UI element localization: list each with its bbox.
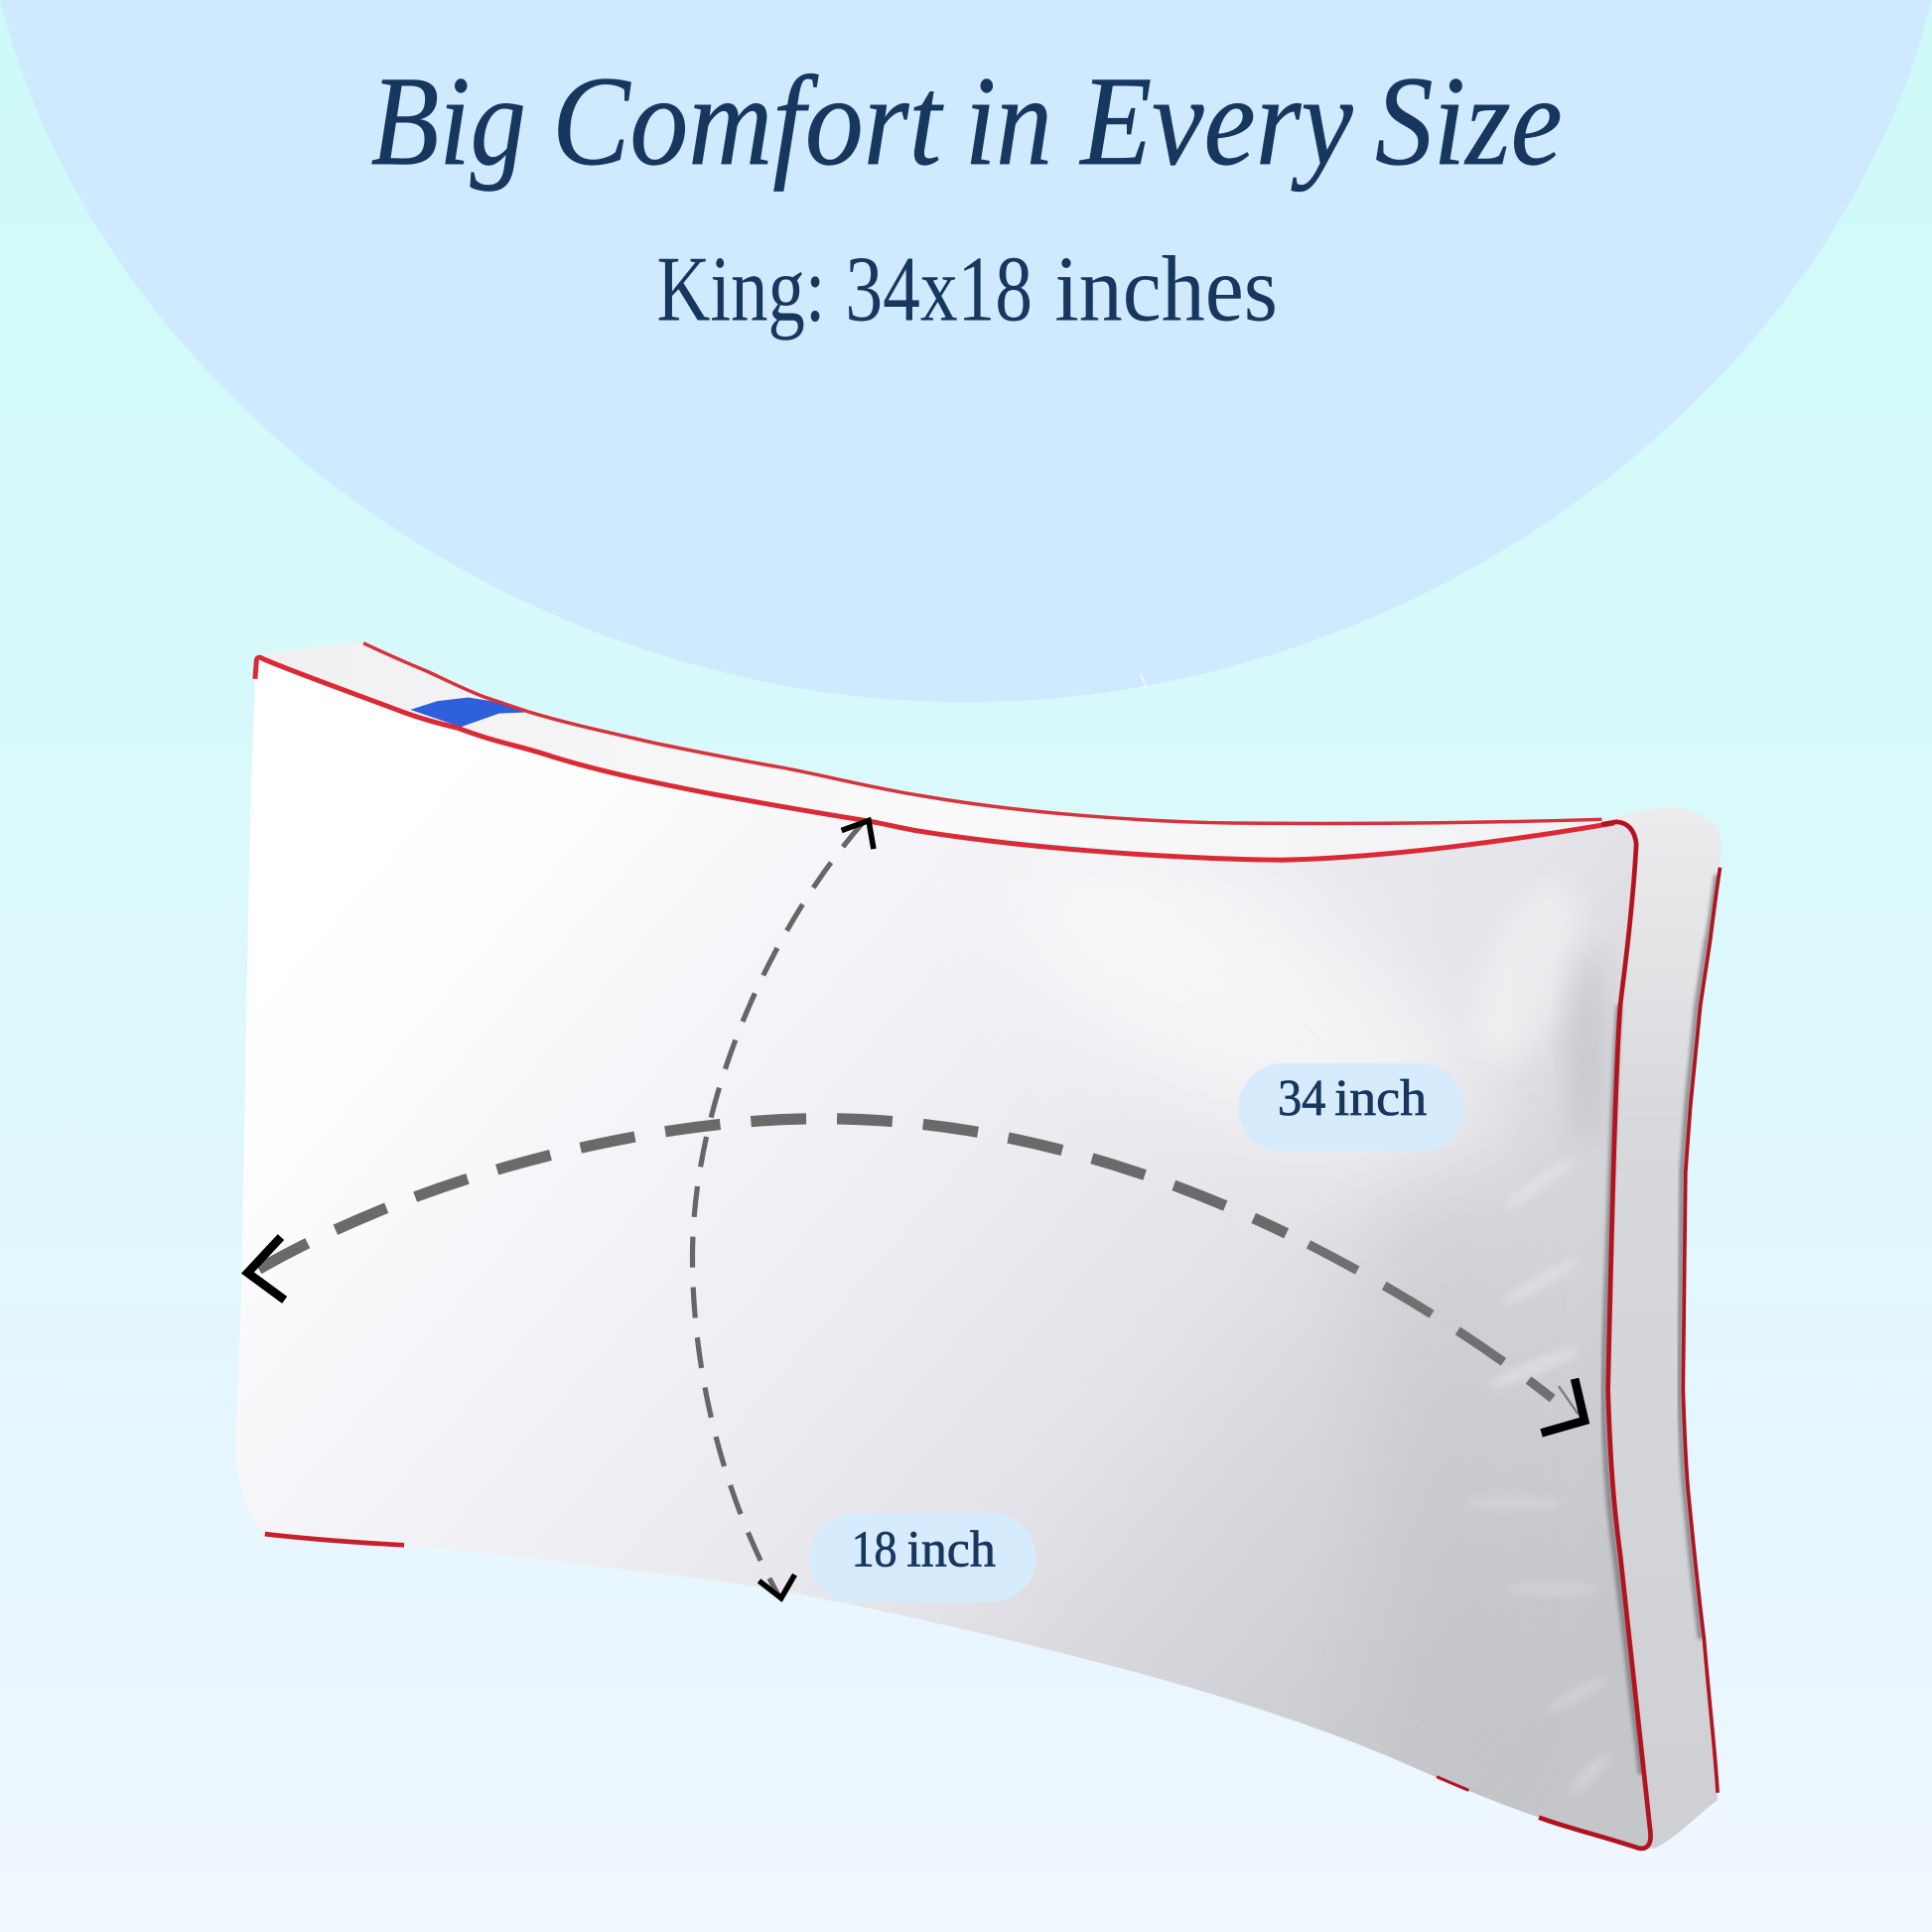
label: 18 inch: [809, 1513, 1036, 1601]
label: 18 inch: 18: [852, 1521, 897, 1578]
bottom left red piping: [265, 1534, 404, 1545]
back red piping: [363, 643, 1601, 824]
subtitle: king size: 34x18: [845, 238, 1033, 342]
width arrowhead left: [247, 1237, 285, 1300]
label: 18 inch: inch: [906, 1521, 996, 1578]
subtitle: king size: King:: [656, 238, 826, 342]
label: 34 inch: 34: [1278, 1070, 1325, 1127]
small notch on semicircle: [1141, 674, 1146, 688]
pillow front face: [235, 656, 1651, 1849]
pillow top band: [256, 643, 1636, 865]
back right shadow line: [1680, 875, 1717, 1639]
width dashed curve left: [259, 1119, 1287, 1269]
label: 34 inch: inch: [1334, 1070, 1427, 1127]
height arrowhead top: [842, 821, 874, 849]
bottom right red piping: [1437, 1777, 1468, 1790]
pillow side gusset: [1596, 807, 1722, 1849]
height arrowhead bottom: [759, 1575, 794, 1598]
width arrowhead right: [1542, 1379, 1585, 1433]
fabric highlights and wrinkles: [967, 778, 1614, 1799]
width arrow tip: [1559, 1386, 1579, 1415]
title: Big: [371, 50, 526, 192]
label: 34 inch: [1238, 1063, 1465, 1152]
corner and side inner shadow: [1603, 1006, 1641, 1774]
front red piping: [255, 657, 1614, 860]
back right red piping: [1683, 868, 1721, 1793]
pillow: [235, 643, 1722, 1849]
subtitle: king size: inches: [1054, 238, 1278, 342]
title: Comfort: [552, 50, 944, 192]
header semicircle: [0, 0, 1932, 702]
title: in: [965, 50, 1052, 192]
height arrow: [692, 821, 874, 1598]
subtitle: king size: [656, 238, 1278, 342]
title: Every: [1079, 50, 1353, 192]
title: Size: [1375, 50, 1563, 192]
width arrow: [247, 1119, 1585, 1433]
width dashed curve right: [1287, 1233, 1553, 1399]
title: [371, 50, 1563, 192]
blue brand tag: [410, 697, 530, 727]
height dashed curve: [692, 823, 863, 1595]
front right red piping: [1539, 822, 1651, 1849]
